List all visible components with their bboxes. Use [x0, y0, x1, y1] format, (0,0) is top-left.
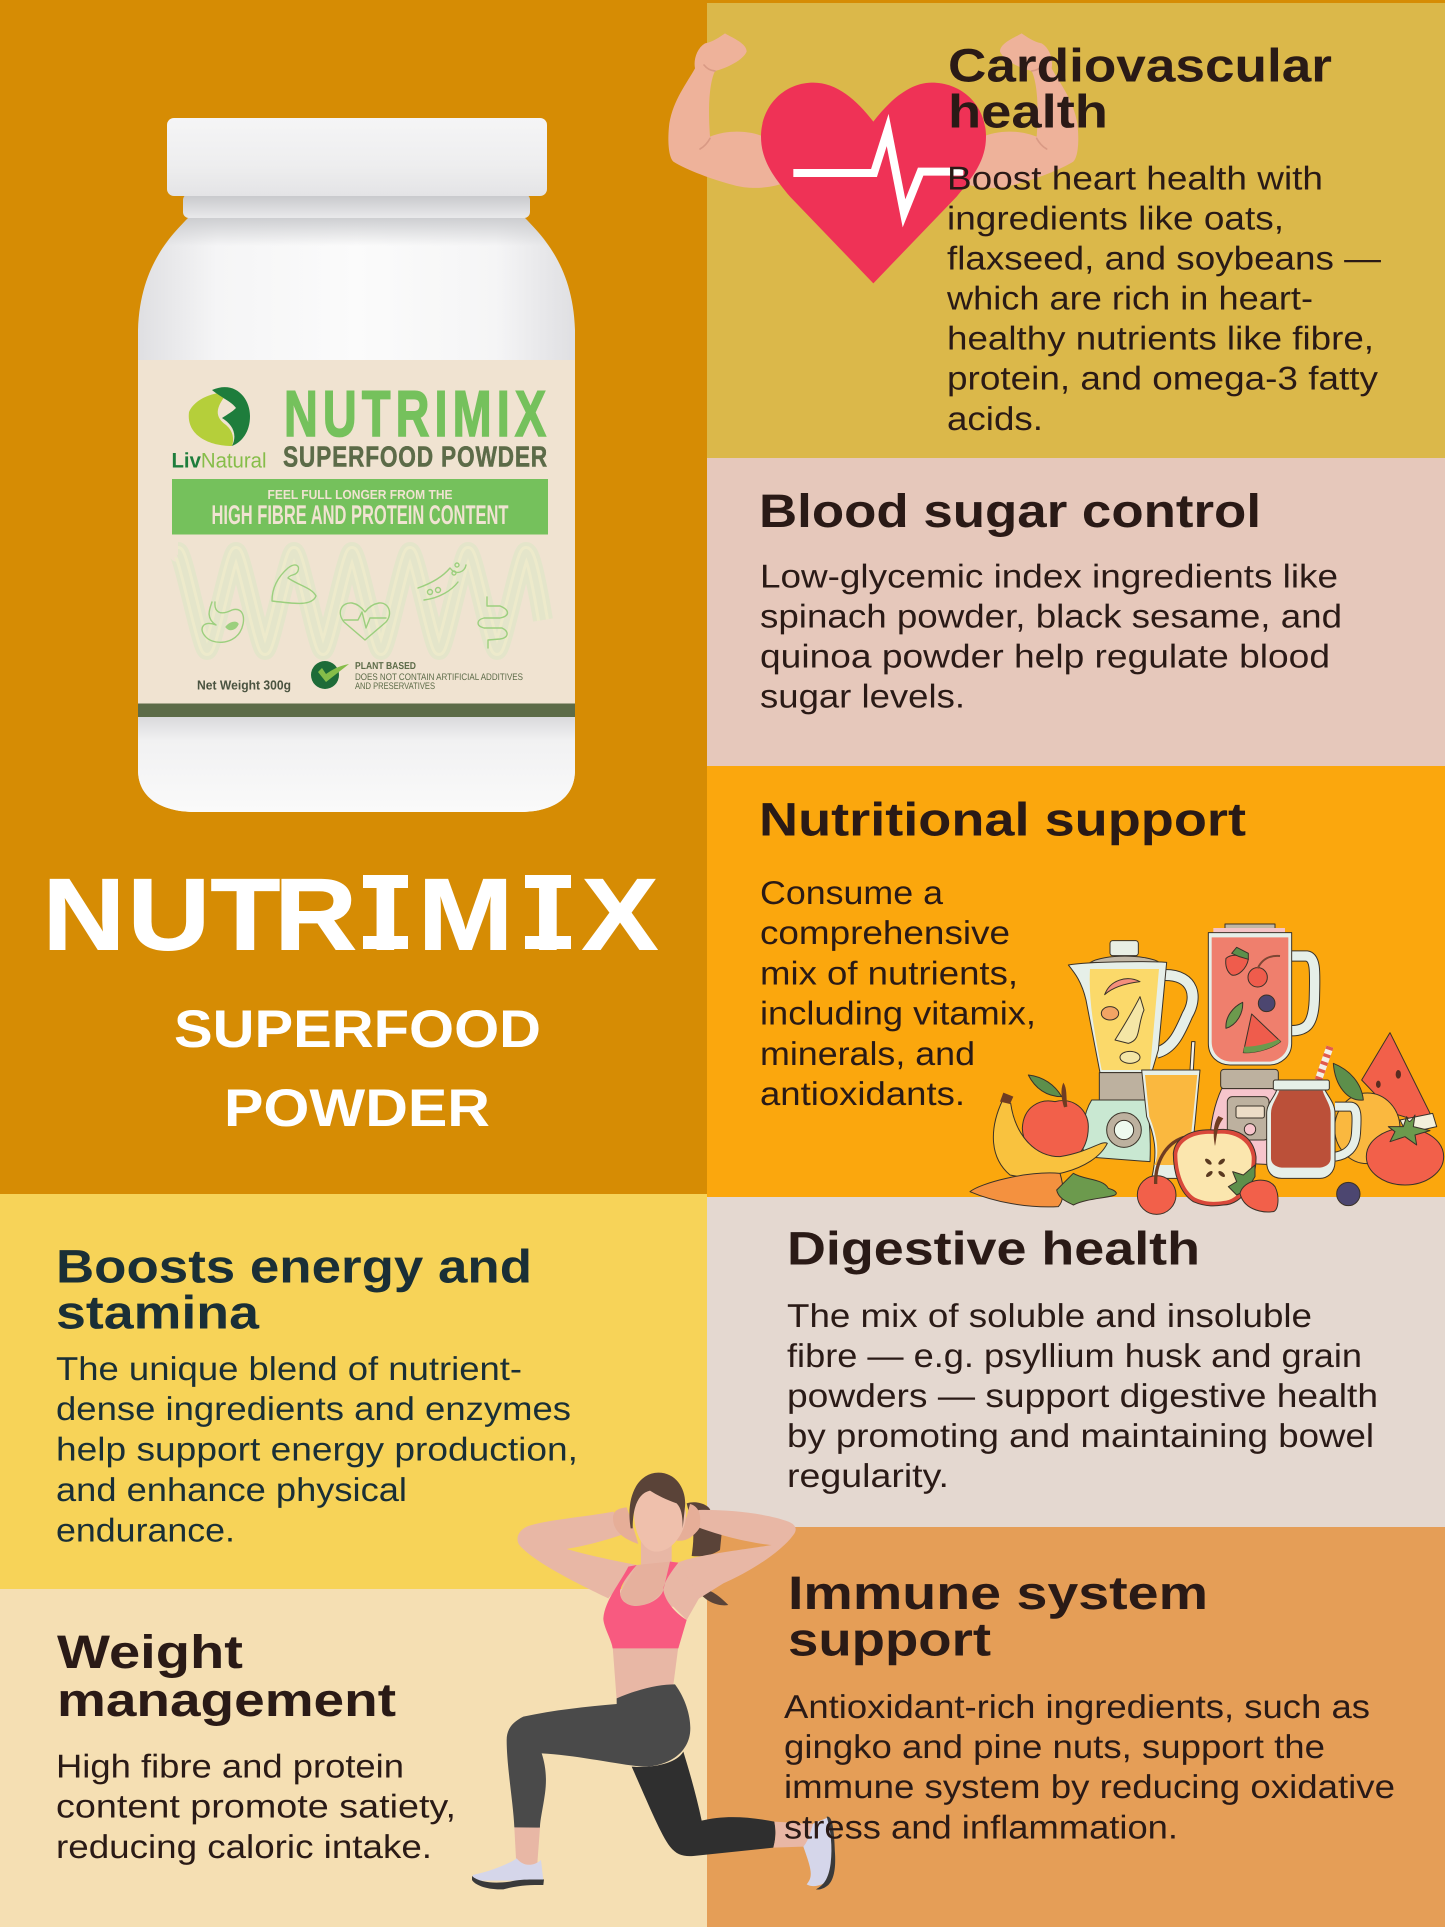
neck and chest [620, 1540, 700, 1620]
midriff [613, 1647, 678, 1700]
label logo [189, 387, 250, 446]
heading: cardiovascular health: health [948, 85, 1108, 138]
blueberry [1337, 1182, 1360, 1206]
face [634, 1489, 686, 1552]
panel: product hero background [0, 0, 707, 1194]
chest shadow [620, 1562, 670, 1606]
panel: weight management background [0, 1589, 707, 1927]
text: nutritional support: mix of nutrients, [760, 954, 1018, 992]
text: cardiovascular health: which are rich in heart- [946, 279, 1313, 316]
text: digestive health: regularity. [787, 1457, 949, 1494]
text: weight management: content promote satiety, [56, 1788, 456, 1825]
label plant based note [355, 661, 523, 692]
text: immune system support: stress and inflammation. [784, 1808, 1178, 1846]
subtitle [174, 1000, 541, 1138]
jar neck [183, 194, 530, 218]
halved apple [1173, 1116, 1256, 1206]
jar cap [167, 118, 547, 196]
main title: NUTRIMIX [43, 857, 658, 971]
ponytail [687, 1502, 728, 1605]
label plant based note: PLANT BASED [355, 661, 416, 672]
heading: blood sugar control: Blood sugar control [759, 484, 1261, 537]
label plant based badge [311, 661, 349, 689]
title letter I slabs [363, 875, 571, 949]
peach leaf [1333, 1063, 1363, 1100]
watermelon slice [1362, 1033, 1437, 1133]
text: digestive health: The mix of soluble and insoluble [787, 1297, 1312, 1334]
text: blood sugar control: quinoa powder help regulate blood [760, 638, 1330, 674]
text: cardiovascular health: protein, and omega-3 fatty [947, 359, 1379, 396]
text: weight management: reducing caloric intake. [56, 1828, 432, 1865]
text: digestive health: by promoting and maintaining bowel [787, 1417, 1374, 1454]
jar shoulder shading [163, 215, 550, 246]
heading: cardiovascular health [948, 39, 1332, 138]
label brand name: LivNatural [172, 450, 266, 472]
sports bra [603, 1562, 687, 1648]
text: nutritional support: Consume a [760, 874, 944, 911]
text: blood sugar control: sugar levels. [760, 678, 965, 714]
text: boosts energy and stamina: The unique blend of nutrient- [56, 1350, 522, 1387]
label product subtitle: SUPERFOOD POWDER [283, 442, 548, 474]
tomato [1366, 1115, 1444, 1185]
icon: left arm [668, 33, 787, 188]
text: cardiovascular health: healthy nutrients like fibre, [947, 319, 1374, 356]
label green banner: FEEL FULL LONGER FROM THE [268, 487, 453, 502]
text: blood sugar control: spinach powder, black sesame, and [760, 598, 1342, 634]
jar label [138, 360, 575, 704]
mason jar drink [1267, 1047, 1357, 1178]
label product name: NUTRIMIX [284, 377, 546, 450]
text: boosts energy and stamina: and enhance physical [56, 1471, 407, 1508]
text: nutritional support: including vitamix, [760, 995, 1036, 1032]
text: immune system support [784, 1688, 1395, 1846]
back ankle [773, 1822, 813, 1848]
hands [613, 1504, 700, 1544]
heading: cardiovascular health: Cardiovascular [948, 39, 1332, 92]
heading: boosts energy and stamina [56, 1239, 532, 1339]
text: weight management [56, 1748, 456, 1865]
back shoe [803, 1817, 835, 1890]
text: digestive health: fibre — e.g. psyllium husk and grain [787, 1337, 1362, 1374]
left arm [517, 1512, 637, 1598]
heading: boosts energy and stamina: Boosts energy and [56, 1239, 532, 1292]
heading: immune system support: support [788, 1613, 991, 1666]
label green banner [172, 479, 548, 534]
banana [993, 1093, 1107, 1177]
carrot [970, 1173, 1116, 1207]
heading: immune system support: Immune system [788, 1566, 1208, 1619]
text: boosts energy and stamina: help support energy production, [56, 1431, 578, 1468]
text: cardiovascular health: Boost heart health with [947, 159, 1323, 196]
text: boosts energy and stamina: endurance. [56, 1512, 235, 1548]
icon: heart [761, 83, 986, 283]
hair [629, 1473, 685, 1528]
front ankle [514, 1827, 540, 1865]
label green banner: HIGH FIBRE AND PROTEIN CONTENT [212, 500, 509, 530]
label plant based note: AND PRESERVATIVES [355, 681, 435, 692]
text: weight management: High fibre and protein [56, 1748, 404, 1785]
text: blood sugar control [760, 558, 1342, 714]
label stripe [138, 704, 575, 717]
left blender [1068, 941, 1193, 1162]
text: boosts energy and stamina [56, 1350, 578, 1548]
panel: blood sugar control background [707, 458, 1445, 766]
panel: cardiovascular health background [707, 3, 1445, 458]
jar body [138, 215, 575, 812]
illustration: woman doing a lunge [472, 1473, 835, 1890]
peach [1335, 1093, 1400, 1164]
orange drink glass [1142, 1042, 1200, 1178]
heading: immune system support [788, 1566, 1208, 1666]
strawberry [1228, 1165, 1278, 1212]
back leg [632, 1752, 775, 1856]
right blender [1208, 924, 1315, 1165]
label health icons [202, 563, 508, 648]
text: digestive health: powders — support digestive health [787, 1377, 1378, 1414]
icon: right arm [960, 33, 1078, 188]
icon: arm creases [700, 65, 1047, 149]
text: cardiovascular health: flaxseed, and soybeans — [947, 239, 1381, 276]
label net weight: Net Weight 300g [197, 677, 291, 692]
jar lower band [138, 717, 575, 812]
label plant based note: DOES NOT CONTAIN ARTIFICIAL ADDITIVES [355, 672, 523, 683]
text: digestive health [787, 1297, 1378, 1494]
panel: digestive health background [707, 1197, 1445, 1527]
heading: boosts energy and stamina: stamina [56, 1286, 260, 1339]
front leg [507, 1684, 690, 1829]
heading: digestive health: Digestive health [787, 1222, 1200, 1275]
apple [1022, 1075, 1088, 1160]
text: immune system support: Antioxidant-rich ingredients, such as [784, 1688, 1370, 1725]
front shoe [472, 1858, 544, 1889]
panel: nutritional support background [707, 766, 1445, 1197]
right arm [677, 1510, 796, 1600]
text: nutritional support: antioxidants. [760, 1075, 965, 1112]
icon: flexing arms and heart [668, 33, 1078, 283]
text: blood sugar control: Low-glycemic index ingredients like [760, 558, 1338, 594]
product jar [138, 118, 575, 812]
heading: weight management: Weight [57, 1625, 243, 1678]
text: immune system support: immune system by reducing oxidative [784, 1768, 1395, 1805]
cherry [1137, 1137, 1184, 1214]
illustration: blenders and fruit [970, 924, 1444, 1214]
subtitle: POWDER [224, 1079, 490, 1138]
heading: weight management: management [57, 1673, 396, 1726]
text: cardiovascular health [946, 159, 1381, 437]
text: nutritional support: comprehensive [760, 914, 1010, 951]
text: immune system support: gingko and pine nuts, support the [784, 1728, 1325, 1765]
icon: heartbeat line [793, 130, 963, 213]
label wave pattern [178, 552, 543, 650]
text: cardiovascular health: acids. [947, 400, 1043, 437]
panel: immune system support background [707, 1527, 1445, 1927]
panel: boosts energy background [0, 1194, 707, 1589]
text: nutritional support: minerals, and [760, 1035, 975, 1072]
text: boosts energy and stamina: dense ingredients and enzymes [56, 1390, 571, 1427]
heading: weight management [57, 1625, 396, 1726]
text: nutritional support [760, 874, 1036, 1112]
heading: nutritional support: Nutritional support [759, 792, 1246, 845]
text: cardiovascular health: ingredients like oats, [947, 199, 1284, 236]
subtitle: SUPERFOOD [174, 1000, 541, 1059]
